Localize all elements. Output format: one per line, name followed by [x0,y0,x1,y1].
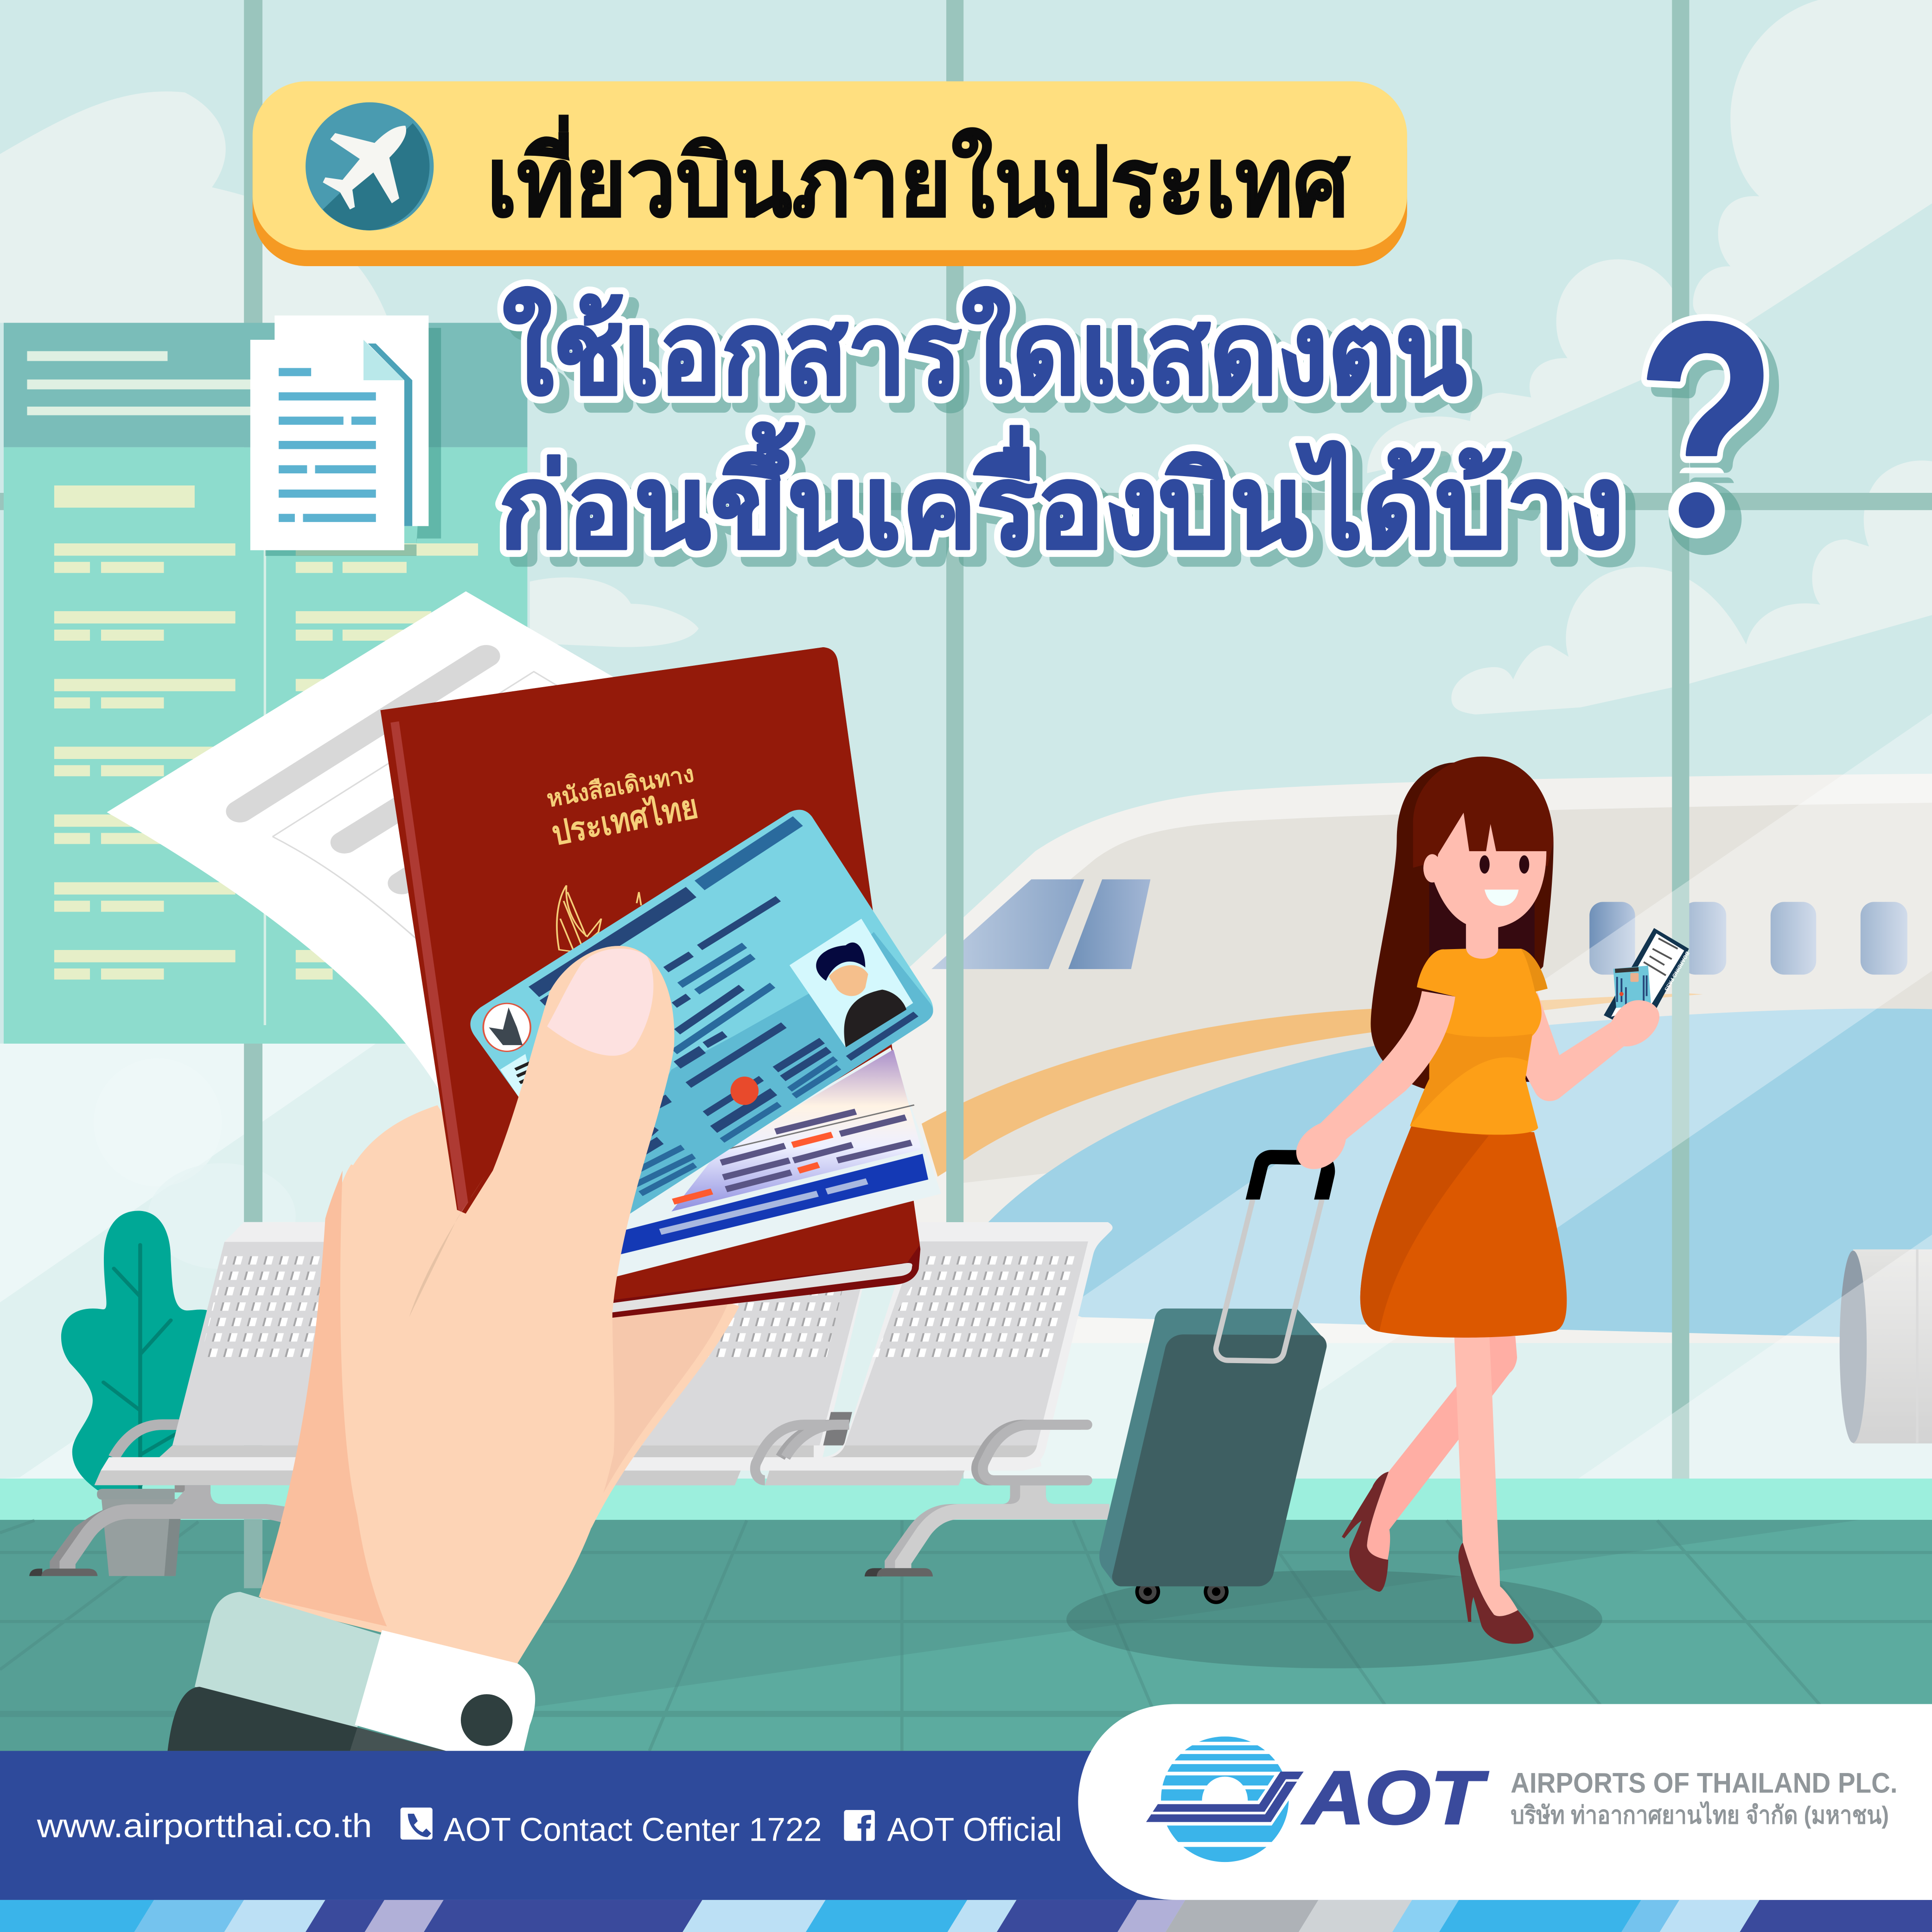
national seal [483,1003,530,1052]
bottom colour stripes [0,1900,1932,1932]
icon: phone [401,1808,433,1840]
passport text: หนังสือเดินทาง [545,760,696,812]
headline fill: ใช้เอกสารใดแสดงตน [503,287,1466,418]
white logo panel [1078,1704,1932,1900]
flight information board [4,323,527,1044]
woman upper body [1296,757,1690,1169]
headline white outline [499,266,1775,572]
ID photo [790,918,913,1047]
shirt cuff and sleeve [167,1592,535,1751]
headline fill [499,266,1775,572]
armrests [755,1425,1087,1480]
seat perforations left [201,1256,345,1358]
AOT logo emblem [1146,1736,1304,1862]
contact center: AOT Contact Center 1722 [444,1811,822,1848]
passport text: ประเทศไทย [548,786,701,853]
skirt [1360,1126,1567,1338]
palm and thumb [259,946,674,1664]
cabin windows [1589,902,1907,975]
headline fill: ก่อนขึ้นเครื่องบินได้บ้าง [499,422,1624,572]
title pill [253,81,1407,266]
window frame [0,0,1932,1479]
clouds [0,0,1932,714]
headline white outline: ใช้เอกสารใดแสดงตน [503,287,1466,418]
floor [0,1479,1932,1754]
garuda emblem [557,886,641,952]
back leg and shoe [1342,1336,1517,1592]
seat left [29,1222,338,1576]
arm holding suitcase [1296,991,1455,1169]
airplane outside the window [881,774,1932,1443]
headline fill: ? [1638,266,1775,569]
ID card [470,810,933,1219]
passport cover [381,647,920,1318]
seat perforations right [616,1256,1076,1358]
company name: AIRPORTS OF THAILAND PLC. [1511,1767,1898,1799]
boarding pass and card in hand: BOARDING PASS [1663,950,1690,992]
top [1410,949,1548,1135]
headline shadow [509,276,1785,581]
back of hand behind passport [308,1105,740,1540]
AOT wordmark: AOT [1301,1756,1489,1840]
boarding pass and card in hand [1604,928,1690,1046]
icon: airplane in circle [306,102,434,230]
boarding ticket [611,1047,941,1278]
document icon [250,315,441,556]
cockpit windows [931,880,1150,969]
right seat [765,1222,1113,1486]
headline white outline: ก่อนขึ้นเครื่องบินได้บ้าง [499,422,1624,572]
headline question [499,266,1785,581]
hair [1371,762,1554,1090]
title text: เที่ยวบินภายในประเทศ [487,115,1350,236]
company name thai: บริษัท ท่าอากาศยานไทย จำกัด (มหาชน) [1511,1801,1889,1829]
raised arm [1525,992,1624,1101]
middle seat [607,1241,873,1486]
website: www.airportthai.co.th [37,1807,372,1844]
hand holding documents [107,591,941,1751]
headline shadow: ก่อนขึ้นเครื่องบินได้บ้าง [509,432,1634,581]
thumbnail [547,949,653,1056]
paper sheet behind [107,591,621,1114]
jet engine [1840,1250,1932,1443]
passport text [545,760,701,853]
footer bar [0,1751,1932,1900]
icon: facebook [844,1810,875,1841]
front leg and shoe [1454,1336,1534,1644]
glass reflection bands [818,714,1932,1479]
face [1423,813,1546,959]
floor shadow and suitcase and legs [1066,1126,1602,1668]
facebook name: AOT Official [887,1811,1062,1848]
plant [61,1211,208,1490]
headline shadow: ? [1647,276,1785,579]
headline shadow: ใช้เอกสารใดแสดงตน [513,297,1476,427]
seats right pair [607,1222,1113,1576]
suitcase [1099,1150,1335,1604]
headline white outline: ? [1638,266,1775,569]
